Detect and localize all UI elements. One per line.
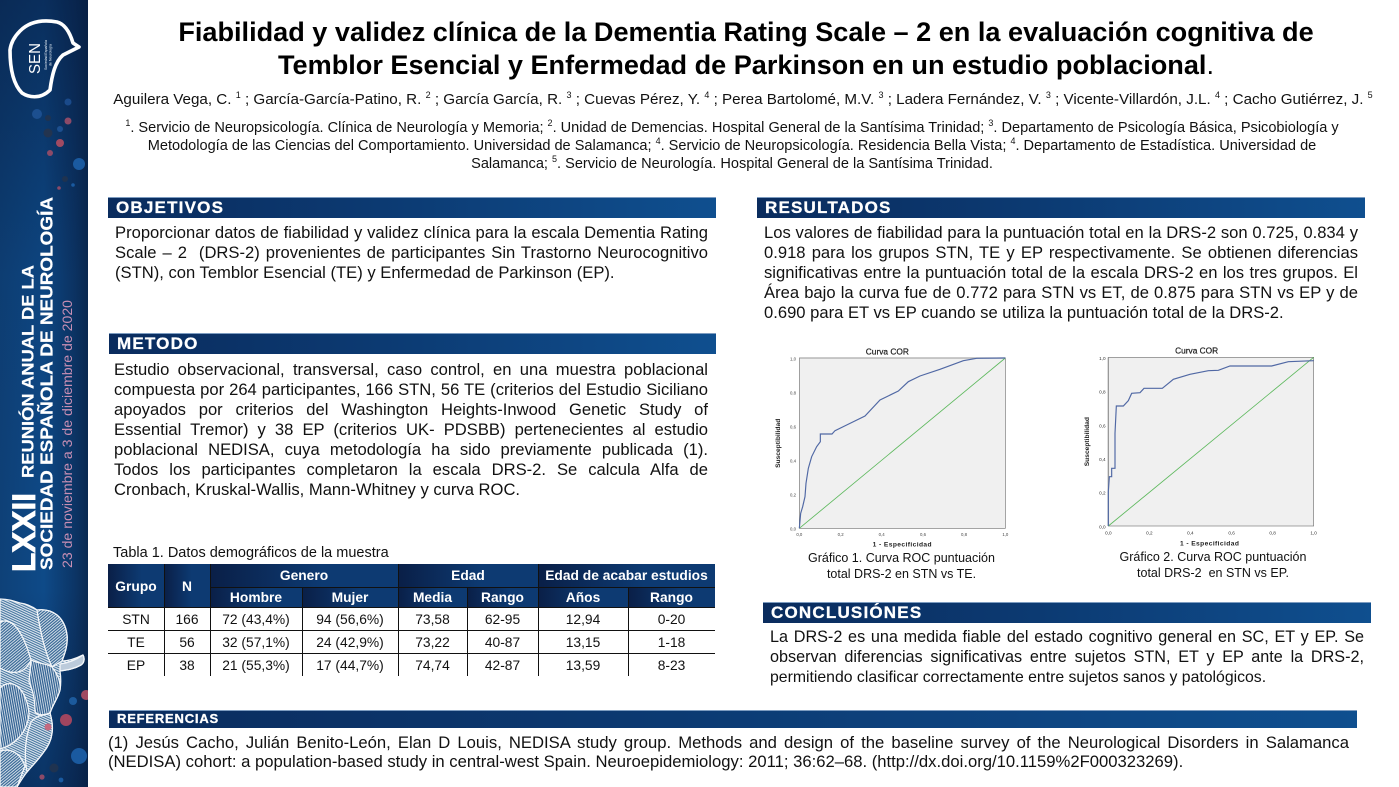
- chart: ROC curve 2: 0,6: [1099, 423, 1106, 428]
- logo SEN: de Neurología: [48, 44, 52, 66]
- text: objetivos: [115, 223, 708, 282]
- chart: ROC curve 1: 0,2: [838, 532, 844, 537]
- chart: ROC curve 2: Curva COR: [1175, 345, 1218, 355]
- text: metodo: Essential Tremor) y 38 EP (criterios UK- PDSBB) pertenecientes al estudio: [114, 420, 708, 439]
- table: demographics: 166: [175, 612, 199, 626]
- table: demographics: 72 (43,4%): [222, 612, 290, 626]
- table: demographics: 40-87: [485, 634, 520, 650]
- caption: chart 2: Gráfico 2. Curva ROC puntuación: [1120, 550, 1306, 564]
- table: demographics: TE: [127, 634, 145, 650]
- caption: chart 2: [1120, 550, 1306, 580]
- table: demographics: N: [182, 578, 192, 594]
- caption: chart 1: [808, 551, 995, 581]
- table: demographics: Años: [566, 590, 600, 605]
- text: conclusiones: [770, 628, 1364, 686]
- chart: ROC curve 1: 0,6: [790, 425, 797, 430]
- title: Temblor Esencial y Enfermedad de Parkinson en un estudio poblacional.: [278, 49, 1214, 80]
- table caption: Tabla 1. Datos demográficos de la muestra: [113, 545, 389, 561]
- text: resultados: Área bajo la curva fue de 0.772 para STN vs ET, de 0.875 para STN vs EP y de: [764, 283, 1358, 302]
- title: [178, 16, 1314, 80]
- chart: ROC curve 2: 0,8: [1269, 531, 1276, 536]
- chart: ROC curve 1: 0,4: [879, 532, 885, 537]
- logo SEN: SEN: [27, 43, 44, 74]
- chart: ROC curve 2: 0,2: [1099, 491, 1106, 496]
- table: demographics: STN: [122, 612, 150, 626]
- heading: objetivos: [108, 197, 716, 218]
- chart: ROC curve 1: 1 - Especificidad: [873, 542, 932, 549]
- chart: ROC curve 1: 1,0: [790, 357, 797, 362]
- table: demographics: Rango: [481, 590, 524, 605]
- chart: ROC curve 2: [1084, 345, 1317, 547]
- chart: ROC curve 1: 0,8: [961, 532, 968, 537]
- text: resultados: significativas entre la puntuación total de la escala DRS-2 en los tres grupos. El: [764, 263, 1358, 282]
- text: resultados: 0.918 para los grupos STN, TE y EP respectivamente. Se obtienen diferencias: [764, 243, 1358, 262]
- chart: ROC curve 1: 0,2: [790, 493, 797, 498]
- heading: objetivos: OBJETIVOS: [116, 198, 224, 217]
- sidebar congress text: 23 de noviembre a 3 de diciembre de 2020: [60, 300, 75, 568]
- table: demographics: 13,59: [566, 658, 600, 672]
- chart: ROC curve 1: 1,0: [1002, 532, 1009, 537]
- chart: ROC curve 2: 0,0: [1105, 531, 1112, 536]
- table: demographics: 24 (42,9%): [316, 634, 384, 650]
- chart: ROC curve 2: 0,8: [1099, 390, 1106, 395]
- table: demographics: [108, 564, 715, 676]
- table: demographics: 73,22: [415, 634, 450, 650]
- text: resultados: 0.690 para ET vs EP cuando se utiliza la puntuación total de la DRS-2.: [764, 303, 1284, 322]
- text: resultados: Los valores de fiabilidad para la puntuación total en la DRS-2 son 0.725, 0.834 y: [764, 223, 1358, 242]
- heading: resultados: [757, 197, 1365, 218]
- chart: ROC curve 2: Susceptibilidad: [1084, 417, 1091, 466]
- caption: chart 2: total DRS-2 en STN vs EP.: [1137, 566, 1289, 580]
- chart: ROC curve 1: Susceptibilidad: [775, 419, 782, 468]
- decorative dots top: [32, 98, 85, 190]
- text: objetivos: Scale – 2 (DRS-2) provenientes de participantes Sin Trastorno Neurocognitivo: [115, 243, 708, 262]
- table: demographics: 1-18: [658, 634, 685, 650]
- table: demographics: 94 (56,6%): [316, 612, 384, 626]
- table: demographics: Hombre: [230, 590, 282, 605]
- table: demographics: 17 (44,7%): [316, 658, 384, 672]
- affiliations: Metodología de las Ciencias del Comportamiento. Universidad de Salamanca; 4. Servicio de Neuropsicología. Residencia Bella Vista; 4. Departamento de Estadística. Universidad de: [148, 136, 1316, 154]
- text: metodo: [114, 360, 708, 499]
- chart: ROC curve 1: 0,8: [790, 391, 797, 396]
- text: metodo: apoyados por criterios del Washington Heights-Inwood Genetic Study of: [114, 400, 708, 419]
- text: resultados: [764, 223, 1358, 322]
- heading: metodo: [109, 333, 716, 354]
- text: referencias: [108, 733, 1349, 771]
- table: demographics: 21 (55,3%): [222, 658, 290, 672]
- table: demographics: Rango: [650, 590, 693, 605]
- text: conclusiones: observan diferencias significativas entre sujetos STN, ET y EP ante la DRS-2,: [770, 648, 1364, 666]
- text: referencias: (1) Jesús Cacho, Julián Benito-León, Elan D Louis, NEDISA study group. Methods and design of the baseline survey of the Neurological Disorders in Salamanca: [108, 733, 1349, 752]
- heading: referencias: [109, 710, 1357, 728]
- chart: ROC curve 2: 0,6: [1228, 531, 1235, 536]
- affiliations: Salamanca; 5. Servicio de Neurología. Hospital General de la Santísima Trinidad.: [471, 154, 993, 172]
- table: demographics: 73,58: [415, 612, 450, 626]
- chart: ROC curve 1: 0,0: [790, 527, 797, 532]
- heading: metodo: METODO: [117, 334, 199, 353]
- table: demographics: 42-87: [485, 658, 520, 672]
- text: metodo: Todos los participantes completaron la escala DRS-2. Se calcula Alfa de: [114, 460, 708, 479]
- table: demographics: Edad: [451, 568, 485, 583]
- sidebar: [0, 0, 88, 787]
- chart: ROC curve 1: 0,6: [920, 532, 927, 537]
- chart: ROC curve 1: [775, 347, 1009, 549]
- heading: referencias: REFERENCIAS: [117, 711, 219, 726]
- text: metodo: poblacional NEDISA, cuya metodología ha sido previamente publicada (1).: [114, 440, 708, 459]
- caption: chart 1: total DRS-2 en STN vs TE.: [827, 567, 976, 581]
- affiliations: 1. Servicio de Neuropsicología. Clínica de Neurología y Memoria; 2. Unidad de Demencias. Hospital General de la Santísima Trinidad; 3. Departamento de Psicología Básica, Psicobiología y: [125, 118, 1339, 136]
- logo SEN: Sociedad Española: [44, 40, 48, 70]
- heading: conclusiones: [763, 602, 1371, 622]
- chart: ROC curve 2: 1,0: [1310, 531, 1317, 536]
- text: metodo: Cronbach, Kruskal-Wallis, Mann-Whitney y curva ROC.: [114, 480, 520, 499]
- text: objetivos: (STN), con Temblor Esencial (TE) y Enfermedad de Parkinson (EP).: [115, 263, 615, 282]
- text: referencias: (NEDISA) cohort: a population-based study in central-west Spain. Neuroepidemiology: 2011; 36:62–68. (http://dx.doi.org/10.1159%2F000323269).: [108, 752, 1183, 771]
- sidebar congress text: REUNIÓN ANUAL DE LA: [18, 265, 38, 478]
- text: objetivos: Proporcionar datos de fiabilidad y validez clínica para la escala Dementia Rating: [115, 223, 708, 242]
- table: demographics: Genero: [280, 568, 328, 583]
- table: demographics: Mujer: [332, 590, 368, 605]
- chart: ROC curve 2: 1 - Especificidad: [1180, 540, 1239, 547]
- sidebar congress text: LXXII: [6, 493, 42, 572]
- chart: ROC curve 2: 0,2: [1146, 531, 1153, 536]
- text: conclusiones: La DRS-2 es una medida fiable del estado cognitivo general en SC, ET y EP. Se: [770, 628, 1364, 646]
- chart: ROC curve 1: Curva COR: [866, 347, 909, 357]
- heading: conclusiones: CONCLUSIÓNES: [771, 603, 922, 622]
- table: demographics: 8-23: [658, 658, 685, 672]
- caption: chart 1: Gráfico 1. Curva ROC puntuación: [808, 551, 995, 565]
- table: demographics: Media: [413, 590, 452, 605]
- table: demographics: Grupo: [115, 578, 157, 594]
- chart: ROC curve 1: 0,0: [796, 532, 803, 537]
- title: Fiabilidad y validez clínica de la Dementia Rating Scale – 2 en la evaluación cognitiva de: [178, 16, 1314, 47]
- chart: ROC curve 2: 0,4: [1099, 457, 1106, 462]
- decorative dots bottom: [39, 690, 91, 782]
- chart: ROC curve 1: 0,4: [790, 459, 797, 464]
- chart: ROC curve 2: 0,0: [1099, 524, 1106, 529]
- table: demographics: 32 (57,1%): [222, 634, 290, 650]
- heading: resultados: RESULTADOS: [765, 198, 892, 217]
- chart: ROC curve 2: 0,4: [1187, 531, 1194, 536]
- table: demographics: 13,15: [566, 634, 600, 650]
- affiliations: [125, 118, 1339, 172]
- table: demographics: 62-95: [485, 612, 520, 626]
- table: demographics: 12,94: [566, 612, 600, 626]
- logo SEN: [10, 21, 79, 97]
- authors: Aguilera Vega, C. 1 ; García-García-Patino, R. 2 ; García García, R. 3 ; Cuevas Pérez, Y. 4 ; Perea Bartolomé, M.V. 3 ; Ladera Fernández, V. 3 ; Vicente-Villardón, J.L. 4 ; Cacho Gutiérrez, J. 5: [113, 90, 1373, 108]
- chart: ROC curve 2: 1,0: [1099, 356, 1106, 361]
- table: demographics: EP: [127, 658, 145, 672]
- table: demographics: 0-20: [658, 612, 685, 626]
- brain illustration: [0, 599, 84, 787]
- sidebar congress text: SOCIEDAD ESPAÑOLA DE NEUROLOGÍA: [36, 197, 56, 570]
- table: demographics: 38: [179, 658, 195, 672]
- table: demographics: 56: [179, 634, 195, 650]
- sidebar congress text: [6, 197, 75, 572]
- text: conclusiones: permitiendo clasificar correctamente entre sujetos sanos y patológicos.: [770, 669, 1266, 686]
- table: demographics: 74,74: [415, 658, 450, 672]
- text: metodo: Estudio observacional, transversal, caso control, en una muestra poblacional: [114, 360, 708, 379]
- text: metodo: compuesta por 264 participantes, 166 STN, 56 TE (criterios del Estudio Siciliano: [114, 380, 708, 399]
- table: demographics: Edad de acabar estudios: [545, 568, 708, 583]
